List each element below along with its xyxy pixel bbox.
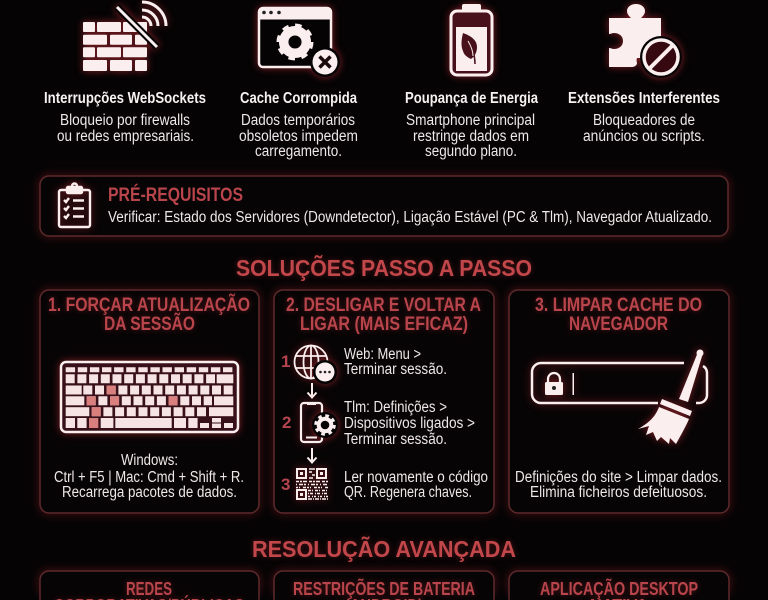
description: [406, 112, 535, 160]
heading: [286, 294, 481, 335]
number 2: 2: [282, 413, 291, 432]
text: phone: Terminar sessão.: [344, 431, 447, 448]
heading: Extensões Interferentes: [568, 90, 720, 107]
heading: [535, 294, 702, 335]
section heading: solutions: SOLUÇÕES PASSO A PASSO: [236, 254, 532, 281]
heading: Poupança de Energia: [405, 90, 538, 107]
description: restringe dados em: [413, 128, 529, 145]
text: QR: QR. Regenera chaves.: [344, 484, 472, 501]
cause: corrupted cache: [239, 8, 358, 160]
text: phone: Tlm: Definições >: [344, 399, 447, 416]
icon: puzzle piece with prohibition sign: [609, 4, 682, 78]
text: QR: Ler novamente o código: [344, 469, 488, 486]
description: [57, 112, 194, 145]
heading: 3. LIMPAR CACHE DO: [535, 294, 702, 316]
description: Recarrega pacotes de dados.: [62, 484, 237, 501]
heading: REDES: [126, 579, 172, 599]
panel: corporate networks: [40, 571, 259, 600]
heading: LIGAR (MAIS EFICAZ): [300, 313, 468, 335]
panel: step 3: [509, 290, 729, 513]
arrow: [308, 383, 316, 398]
icon: clipboard checklist: [59, 184, 90, 227]
panel: battery restrictions: [274, 571, 494, 600]
cause: interfering extensions: [568, 4, 720, 145]
number 1: 1: [281, 352, 290, 371]
heading: NAVEGADOR: [569, 313, 668, 335]
heading: [48, 293, 250, 335]
icon: keyboard: [61, 362, 238, 432]
description: [583, 112, 705, 145]
heading: DA SESSÃO: [104, 312, 195, 335]
text: QR: [344, 469, 488, 501]
description: carregamento.: [255, 143, 342, 160]
cause: energy saving: [405, 4, 538, 160]
section heading: advanced: RESOLUÇÃO AVANÇADA: [252, 535, 516, 562]
description: segundo plano.: [425, 143, 517, 160]
description: [515, 469, 722, 501]
heading: 1. FORÇAR ATUALIZAÇÃO: [48, 293, 250, 316]
description: [239, 112, 358, 160]
cause: WebSockets interruptions: [44, 2, 206, 145]
description: Dados temporários: [241, 112, 355, 129]
panel: step 2: [274, 290, 494, 513]
description: Definições do site > Limpar dados.: [515, 469, 722, 486]
text: phone: [344, 399, 475, 448]
heading: 2. DESLIGAR E VOLTAR A: [286, 294, 481, 316]
description: Ctrl + F5 | Mac: Cmd + Shift + R.: [54, 469, 244, 486]
panel: step 1: [40, 290, 259, 513]
description: Bloqueio por firewalls: [60, 112, 190, 129]
heading: PRÉ-REQUISITOS: [108, 184, 243, 206]
description: [54, 452, 244, 501]
text: web: [344, 346, 447, 378]
description: anúncios ou scripts.: [583, 128, 705, 145]
heading: Cache Corrompida: [240, 90, 357, 107]
text: phone: Dispositivos ligados >: [344, 415, 475, 432]
icon: browser window with gear and x: [259, 8, 340, 77]
arrow: [308, 448, 316, 462]
number 3: 3: [281, 475, 290, 494]
icon: globe with menu dots: [294, 346, 337, 384]
icon: phone with gear: [301, 403, 338, 442]
heading: Interrupções WebSockets: [44, 90, 206, 107]
icon: brick wall with crossed-out wifi: [83, 2, 166, 71]
description: Smartphone principal: [406, 112, 535, 129]
description: Windows:: [121, 452, 178, 469]
heading: RESTRIÇÕES DE BATERIA: [293, 578, 475, 599]
panel: prerequisites: [40, 176, 728, 236]
heading: [54, 579, 244, 600]
description: Bloqueadores de: [593, 112, 695, 129]
panel: native desktop app: [509, 571, 729, 600]
text: web: Web: Menu >: [344, 346, 421, 363]
heading: APLICAÇÃO DESKTOP: [540, 578, 698, 599]
description: ou redes empresariais.: [57, 128, 194, 145]
description: Elimina ficheiros defeituosos.: [530, 484, 707, 501]
icon: battery with leaf: [451, 4, 492, 75]
description: obsoletos impedem: [239, 128, 358, 145]
icon: QR code: [296, 469, 328, 499]
icon: address bar with lock and broom: [532, 350, 707, 444]
text: web: Terminar sessão.: [344, 361, 447, 378]
